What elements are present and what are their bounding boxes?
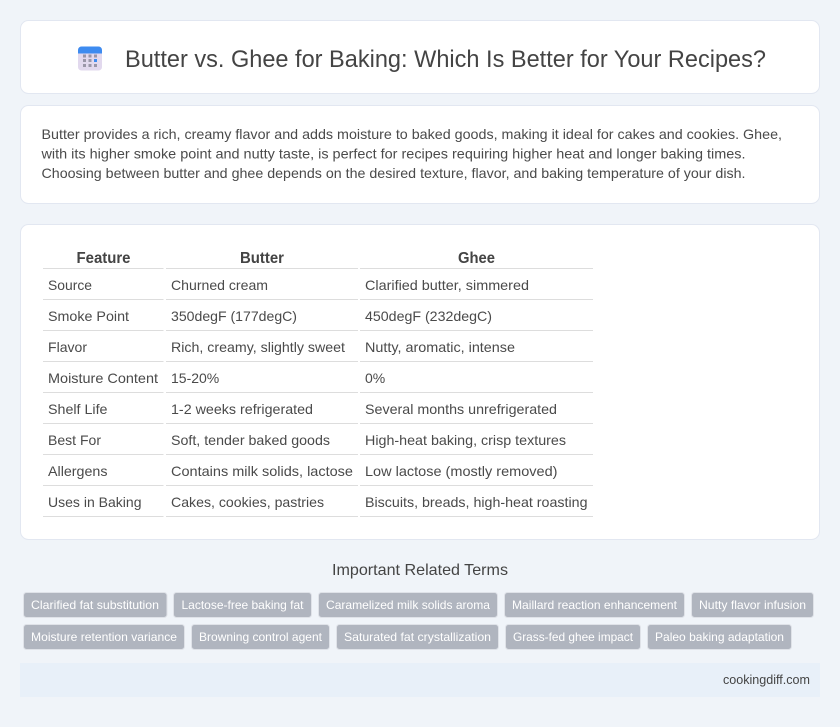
tag (336, 624, 498, 650)
row: allergens (48, 463, 558, 479)
row: moisture content: Moisture Content (48, 370, 158, 386)
tag: Paleo baking adaptation (655, 630, 784, 644)
tag: Clarified fat substitution (31, 598, 159, 612)
tag: Nutty flavor infusion (699, 598, 806, 612)
table header (76, 250, 495, 267)
footer (20, 663, 820, 697)
tag: Browning control agent (199, 630, 323, 644)
row: best for: High-heat baking, crisp textures (365, 432, 566, 448)
tag: Lactose-free baking fat (182, 598, 304, 612)
tag: Maillard reaction enhancement (512, 598, 678, 612)
row: flavor: Nutty, aromatic, intense (365, 339, 515, 355)
summary text: Butter provides a rich, creamy flavor and adds moisture to baked goods, making it ideal for cakes and cookies. Ghee, (42, 126, 782, 142)
row: uses in baking: Biscuits, breads, high-heat roasting (365, 494, 588, 510)
related term tags (24, 592, 814, 650)
table rules (43, 268, 593, 516)
panel: comparison table (20, 224, 820, 540)
summary text: Choosing between butter and ghee depends on the desired texture, flavor, and baking temperature of your dish. (42, 165, 746, 181)
tag (648, 624, 792, 650)
tag (318, 592, 498, 618)
row: smoke point (48, 308, 492, 324)
row: best for: Soft, tender baked goods (171, 432, 330, 448)
tag (692, 592, 814, 618)
row: shelf life: Shelf Life (48, 401, 108, 417)
tag (506, 624, 640, 650)
table header: Feature (76, 250, 131, 267)
row: best for (48, 432, 566, 448)
row: uses in baking: Cakes, cookies, pastries (171, 494, 324, 510)
row: allergens: Allergens (48, 463, 108, 479)
row: uses in baking (48, 494, 588, 510)
icon: calendar (78, 46, 102, 70)
tag: Saturated fat crystallization (344, 630, 491, 644)
tag: Moisture retention variance (31, 630, 177, 644)
row: shelf life: Several months unrefrigerated (365, 401, 557, 417)
summary text: with its higher smoke point and nutty taste, is perfect for recipes requiring higher heat and longer baking times. (40, 146, 745, 162)
row: moisture content: 15-20% (171, 370, 219, 386)
row: smoke point: 450degF (232degC) (365, 308, 492, 324)
row: flavor (48, 339, 515, 355)
row: allergens: Low lactose (mostly removed) (365, 463, 558, 479)
row: moisture content (48, 370, 385, 386)
row: allergens: Contains milk solids, lactose (171, 463, 353, 479)
tag (174, 592, 312, 618)
row: best for: Best For (48, 432, 101, 448)
heading: related terms: Important Related Terms (332, 562, 508, 579)
row: source (48, 277, 529, 293)
row: source: Source (48, 277, 92, 293)
tag (192, 624, 330, 650)
tag (24, 592, 167, 618)
row: shelf life: 1-2 weeks refrigerated (171, 401, 313, 417)
panel: summary (20, 106, 820, 204)
row: source: Clarified butter, simmered (365, 277, 529, 293)
row: flavor: Rich, creamy, slightly sweet (171, 339, 345, 355)
tag: Caramelized milk solids aroma (326, 598, 490, 612)
tag (24, 624, 184, 650)
tag: Grass-fed ghee impact (513, 630, 634, 644)
title text: Butter vs. Ghee for Baking: Which Is Better for Your Recipes? (125, 46, 766, 73)
row: smoke point: 350degF (177degC) (171, 308, 297, 324)
row: flavor: Flavor (48, 339, 87, 355)
table header: Butter (240, 250, 284, 267)
row: shelf life (48, 401, 557, 417)
summary text (40, 126, 782, 181)
table header: Ghee (458, 250, 495, 267)
tag (504, 592, 684, 618)
footer: cookingdiff.com (723, 673, 810, 687)
row: uses in baking: Uses in Baking (48, 494, 142, 510)
panel: title (20, 20, 820, 94)
row: source: Churned cream (171, 277, 268, 293)
row: moisture content: 0% (365, 370, 385, 386)
row: smoke point: Smoke Point (48, 308, 129, 324)
